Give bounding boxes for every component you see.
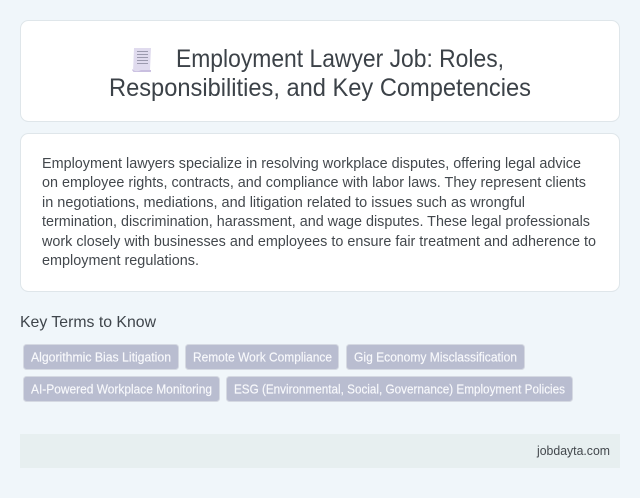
description text: termination, discrimination, harassment, and wage disputes. These legal professionals xyxy=(42,214,590,230)
footer bar: jobdayta.com xyxy=(536,444,610,458)
tag xyxy=(186,344,338,370)
tag: Gig Economy Misclassification xyxy=(354,350,517,364)
panel: description xyxy=(20,134,620,292)
description text: work closely with businesses and employees to ensure fair treatment and adherence to xyxy=(41,234,596,250)
tag: AI-Powered Workplace Monitoring xyxy=(31,382,212,396)
panel: header xyxy=(20,20,620,122)
title: Employment Lawyer Job: Roles, xyxy=(176,45,504,73)
description text: in negotiations, mediations, and litigation related to issues such as wrongful xyxy=(42,195,525,211)
description text: employment regulations. xyxy=(42,253,199,269)
tag: Remote Work Compliance xyxy=(193,350,332,364)
title xyxy=(109,45,531,102)
tag xyxy=(346,344,524,370)
footer bar xyxy=(20,434,620,468)
title: Responsibilities, and Key Competencies xyxy=(109,74,531,102)
tag xyxy=(24,376,220,402)
icon: document xyxy=(132,48,151,73)
heading: key terms: Key Terms to Know xyxy=(20,314,156,331)
tag: Algorithmic Bias Litigation xyxy=(31,350,171,364)
tag: ESG (Environmental, Social, Governance) Employment Policies xyxy=(234,382,565,396)
tag xyxy=(226,376,572,402)
description text: on employee rights, contracts, and compliance with labor laws. They represent clients xyxy=(42,175,586,191)
description text: Employment lawyers specialize in resolving workplace disputes, offering legal advice xyxy=(42,156,581,172)
description text xyxy=(41,156,596,269)
tag xyxy=(24,344,178,370)
